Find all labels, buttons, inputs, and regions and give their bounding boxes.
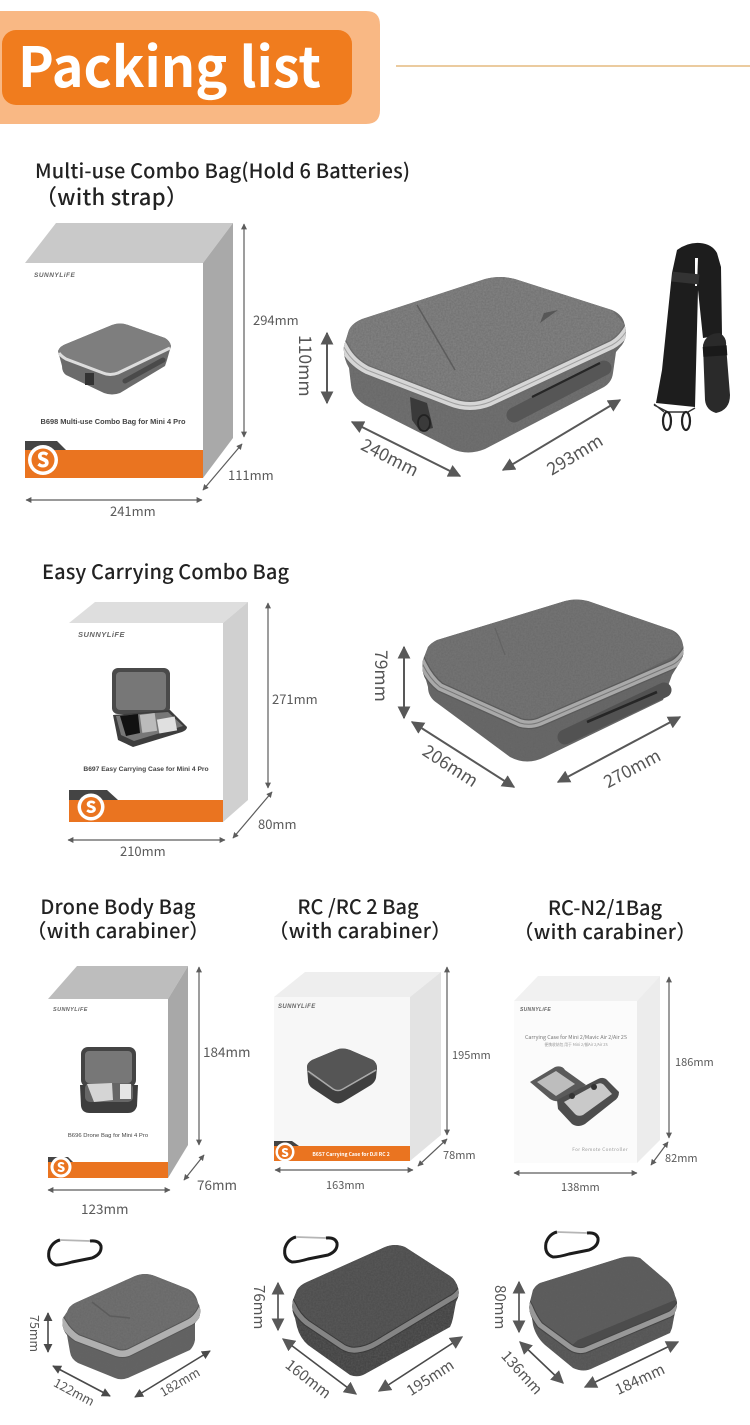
dimension: 182mm <box>135 1351 210 1400</box>
package box: B698 <box>25 223 233 478</box>
dimension: 123mm <box>48 1190 170 1218</box>
heading: drone body bag: （with carabiner） <box>26 915 210 944</box>
dimension: 195mm: 195mm <box>402 1354 458 1401</box>
dimension: 240mm: 240mm <box>357 432 423 482</box>
heading: multi-use combo bag: Multi-use Combo Bag(Hold 6 Batteries) <box>35 155 410 184</box>
shoulder strap <box>654 243 730 430</box>
header: Packing list <box>0 11 380 124</box>
dimension: 76mm <box>249 1283 278 1330</box>
package box: B697: S <box>86 793 97 818</box>
dimension: 206mm: 206mm <box>418 738 483 793</box>
drone body bag photo <box>62 1274 200 1380</box>
dimension: 110mm <box>293 333 327 403</box>
dimension: 294mm: 294mm <box>253 310 299 329</box>
package box: remote controller case: Carrying Case for Mini 2/Mavic Air 2/Air 2S <box>525 1033 627 1041</box>
heading: RC-N2/1 bag: （with carabiner） <box>513 916 697 945</box>
dimension: 182mm: 182mm <box>155 1362 203 1400</box>
carabiner: drone bag <box>49 1240 101 1265</box>
package box: B696: SUNNYLiFE <box>53 1007 88 1013</box>
dimension: 80mm: 80mm <box>490 1285 511 1329</box>
dimension: 79mm <box>369 647 404 718</box>
dimension: 123mm: 123mm <box>81 1198 128 1218</box>
heading: RC / RC 2 bag: RC /RC 2 Bag <box>297 891 419 920</box>
dimension: 82mm <box>651 1142 698 1166</box>
dimension: 206mm <box>412 722 514 793</box>
dimension: 184mm: 184mm <box>611 1358 668 1400</box>
dimension: 184mm: 184mm <box>203 1041 250 1061</box>
dimension: 186mm: 186mm <box>675 1054 714 1070</box>
package box: B6S7: SUNNYLiFE <box>278 1004 316 1010</box>
dimension: 78mm: 78mm <box>443 1147 476 1163</box>
dimension: 138mm <box>514 1173 637 1195</box>
heading: RC / RC 2 bag <box>268 891 452 944</box>
heading: drone body bag <box>26 891 210 944</box>
multi-use bag photo <box>344 277 626 452</box>
dimension: 293mm <box>503 400 620 481</box>
package box: B697: B697 Easy Carrying Case for Mini 4 Pro <box>83 766 209 773</box>
dimension: 78mm <box>418 1139 476 1166</box>
heading: RC-N2/1 bag <box>513 892 697 945</box>
dimension: 80mm <box>490 1282 519 1332</box>
package box: remote controller case <box>514 976 660 1163</box>
dimension: 76mm: 76mm <box>249 1285 270 1329</box>
dimension: 79mm: 79mm <box>369 650 394 702</box>
easy carrying bag photo <box>422 600 684 762</box>
dimension: 80mm: 80mm <box>258 814 297 833</box>
dimension: 184mm <box>585 1342 678 1400</box>
package box: B6S7 <box>274 972 441 1162</box>
dimension: 75mm: 75mm <box>26 1315 45 1352</box>
heading: RC / RC 2 bag: （with carabiner） <box>268 915 452 944</box>
heading: RC-N2/1 bag: RC-N2/1Bag <box>548 892 663 921</box>
dimension: 270mm <box>558 717 680 794</box>
dimension: 122mm: 122mm <box>51 1372 98 1410</box>
package box: B696: B696 Drone Bag for Mini 4 Pro <box>68 1133 149 1139</box>
package box: B698: B698 Multi-use Combo Bag for Mini 4 Pro <box>41 417 186 426</box>
dimension: 122mm <box>51 1366 110 1410</box>
carabiner: RC 2 bag <box>285 1237 337 1262</box>
dimension: 160mm: 160mm <box>281 1354 336 1403</box>
package box: B696 <box>48 966 188 1178</box>
RC / RC 2 bag photo <box>292 1245 459 1376</box>
dimension: 138mm: 138mm <box>561 1179 600 1195</box>
package box: remote controller case: 便携收纳包 用于 Mini 2/御Air 2/Air 2S <box>544 1042 608 1048</box>
dimension: 111mm <box>203 444 274 490</box>
dimension: 163mm <box>275 1170 413 1193</box>
dimension: 270mm: 270mm <box>599 743 665 794</box>
dimension: 163mm: 163mm <box>326 1177 365 1193</box>
dimension: 240mm <box>352 422 460 482</box>
package box: remote controller case: For Remote Controller <box>572 1147 628 1153</box>
package box: B697: SUNNYLiFE <box>78 630 126 639</box>
heading: multi-use combo bag <box>35 155 410 212</box>
dimension: 136mm: 136mm <box>497 1346 548 1399</box>
package box: B696: S <box>57 1157 65 1176</box>
dimension: 271mm: 271mm <box>272 689 318 708</box>
dimension: 195mm: 195mm <box>452 1047 491 1063</box>
dimension: 76mm: 76mm <box>197 1174 237 1194</box>
package box: B697 <box>69 602 248 822</box>
carabiner: RC-N2 bag <box>546 1232 598 1257</box>
dimension: 82mm: 82mm <box>665 1150 698 1166</box>
RC-N2/1 bag photo <box>529 1256 677 1370</box>
package box: B698: S <box>37 444 50 473</box>
heading: multi-use combo bag: （with strap） <box>35 180 188 212</box>
dimension: 80mm <box>233 792 297 838</box>
dimension: 241mm: 241mm <box>110 501 156 520</box>
dimension: 195mm <box>379 1337 462 1401</box>
dimension: 110mm: 110mm <box>293 335 318 397</box>
package box: remote controller case: SUNNYLiFE <box>520 1007 551 1013</box>
dimension: 76mm <box>184 1155 237 1194</box>
package box: B6S7: S <box>281 1144 289 1161</box>
dimension: 210mm: 210mm <box>120 841 166 860</box>
dimension: 293mm: 293mm <box>542 428 607 481</box>
heading: drone body bag: Drone Body Bag <box>40 891 196 920</box>
package box: B6S7: B6S7 Carrying Case for DJI RC 2 <box>312 1151 390 1158</box>
dimension: 160mm <box>281 1339 356 1403</box>
dimension: 111mm: 111mm <box>228 465 274 484</box>
header: Packing list: Packing list <box>18 23 321 103</box>
heading: easy carrying combo bag: Easy Carrying Combo Bag <box>42 556 289 585</box>
package box: B698: SUNNYLiFE <box>34 272 76 279</box>
